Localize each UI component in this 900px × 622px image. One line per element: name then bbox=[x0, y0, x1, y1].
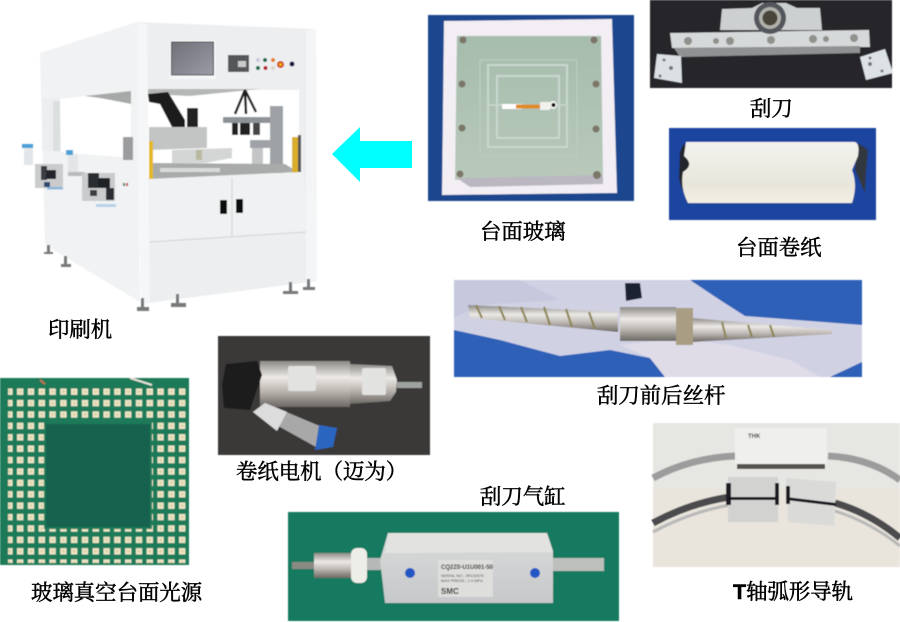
scraper cylinder photo bbox=[288, 512, 619, 621]
overhead cable chain bbox=[148, 92, 185, 127]
print head bbox=[149, 108, 232, 163]
scraper cylinder photo: CQ2Z0-U1U001-50 bbox=[441, 565, 494, 571]
cabinet doors bbox=[150, 172, 306, 242]
arrow pointing to printing machine bbox=[332, 127, 412, 182]
label: T-axis arc rail: T轴弧形导轨 bbox=[733, 580, 853, 604]
control screen bbox=[170, 40, 216, 79]
machine front panel bbox=[137, 22, 317, 304]
right feeder unit bbox=[66, 137, 133, 207]
yellow safety sensors bbox=[149, 135, 301, 179]
front opening bbox=[148, 90, 299, 178]
control buttons bbox=[256, 58, 294, 70]
scraper cylinder photo: MAX PRESS.: 1.0 MPa bbox=[441, 578, 483, 583]
label: table paper roll: 台面卷纸 bbox=[736, 236, 822, 260]
winding motor photo bbox=[218, 336, 430, 455]
scraper photo bbox=[650, 0, 893, 88]
label: scraper cylinder: 刮刀气缸 bbox=[480, 485, 566, 509]
T-axis arc guide rail photo: THK bbox=[748, 434, 761, 440]
camera arm bbox=[223, 90, 283, 173]
left feeder unit bbox=[22, 144, 63, 190]
glass table photo bbox=[428, 15, 634, 201]
scraper lead screw photo bbox=[454, 280, 862, 377]
LED light source panel photo bbox=[0, 378, 189, 565]
machine feet bbox=[44, 245, 315, 311]
side opening bbox=[60, 91, 131, 158]
label: scraper: 刮刀 bbox=[750, 97, 793, 121]
scraper cylinder photo: SMC bbox=[441, 587, 459, 596]
T-axis arc guide rail photo bbox=[653, 423, 900, 567]
machine side panel bbox=[40, 22, 140, 302]
label: scraper front-rear lead screw: 刮刀前后丝杆 bbox=[597, 384, 725, 408]
label: winding motor: 卷纸电机（迈为） bbox=[236, 460, 407, 484]
control keypad bbox=[228, 55, 249, 72]
label: glass vacuum table light source: 玻璃真空台面光源 bbox=[31, 581, 203, 605]
label: printing machine: 印刷机 bbox=[48, 318, 112, 342]
table paper roll photo bbox=[669, 128, 876, 220]
machine bed bbox=[149, 163, 298, 179]
scraper cylinder photo: SERIAL NO.: JR133373 bbox=[441, 573, 485, 578]
printing machine photo bbox=[22, 22, 317, 311]
label: table glass: 台面玻璃 bbox=[480, 220, 566, 244]
